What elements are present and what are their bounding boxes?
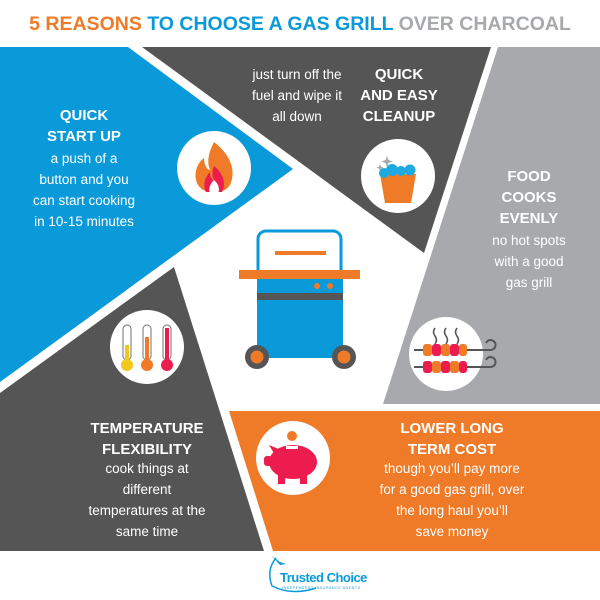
text: quick start up: button and you — [39, 172, 129, 187]
text: cost: the long haul you’ll — [396, 503, 508, 518]
panel: food cooks evenly — [383, 47, 600, 404]
title: 5 REASONS TO CHOOSE A GAS GRILL OVER CHARCOAL — [29, 13, 571, 35]
heading: cleanup: QUICK — [375, 66, 423, 83]
text: food cooks evenly: gas grill — [506, 275, 552, 290]
text: cost: save money — [416, 524, 489, 539]
text: temperature: temperatures at the — [88, 503, 206, 518]
heading: quick start up: QUICK — [60, 107, 108, 124]
text: quick start up: a push of a — [51, 151, 118, 166]
heading: temperature: FLEXIBILITY — [102, 441, 192, 458]
heading: temperature: TEMPERATURE — [90, 420, 204, 437]
logo: Trusted Choice — [270, 556, 367, 592]
heading: quick start up: START UP — [47, 128, 121, 145]
icon: gas grill — [239, 231, 360, 369]
panel: lower long term cost — [229, 411, 600, 551]
icon: skewers — [409, 317, 496, 391]
heading: food cooks evenly: COOKS — [501, 189, 557, 206]
logo: Trusted Choice: Trusted Choice — [280, 570, 367, 585]
text: temperature: cook things at — [105, 461, 189, 476]
logo: Trusted Choice: INDEPENDENT INSURANCE AGENTS — [282, 586, 361, 590]
heading: cleanup: AND EASY — [360, 87, 438, 104]
text: cleanup: all down — [272, 109, 322, 124]
heading: cleanup: CLEANUP — [363, 108, 435, 125]
text: temperature: different — [123, 482, 172, 497]
text: cost: though you’ll pay more — [384, 461, 520, 476]
text: food cooks evenly: with a good — [493, 254, 564, 269]
panel: cleanup — [142, 47, 491, 253]
heading: cost: LOWER LONG — [400, 420, 504, 437]
heading: cost: TERM COST — [408, 441, 496, 458]
heading: food cooks evenly: FOOD — [507, 168, 551, 185]
icon: piggy bank — [256, 421, 330, 495]
text: quick start up: in 10-15 minutes — [34, 214, 134, 229]
text: cleanup: just turn off the — [251, 67, 342, 82]
text: food cooks evenly: no hot spots — [492, 233, 566, 248]
text: cost: for a good gas grill, over — [380, 482, 525, 497]
icon: thermometers — [110, 310, 184, 384]
text: temperature: same time — [116, 524, 178, 539]
heading: food cooks evenly: EVENLY — [500, 210, 558, 227]
panel: quick start up — [0, 47, 293, 382]
text: cleanup: fuel and wipe it — [252, 88, 342, 103]
icon: fire — [177, 131, 251, 205]
panel: temperature flexibility — [0, 267, 264, 551]
icon: bucket — [361, 139, 435, 213]
text: quick start up: can start cooking — [33, 193, 135, 208]
